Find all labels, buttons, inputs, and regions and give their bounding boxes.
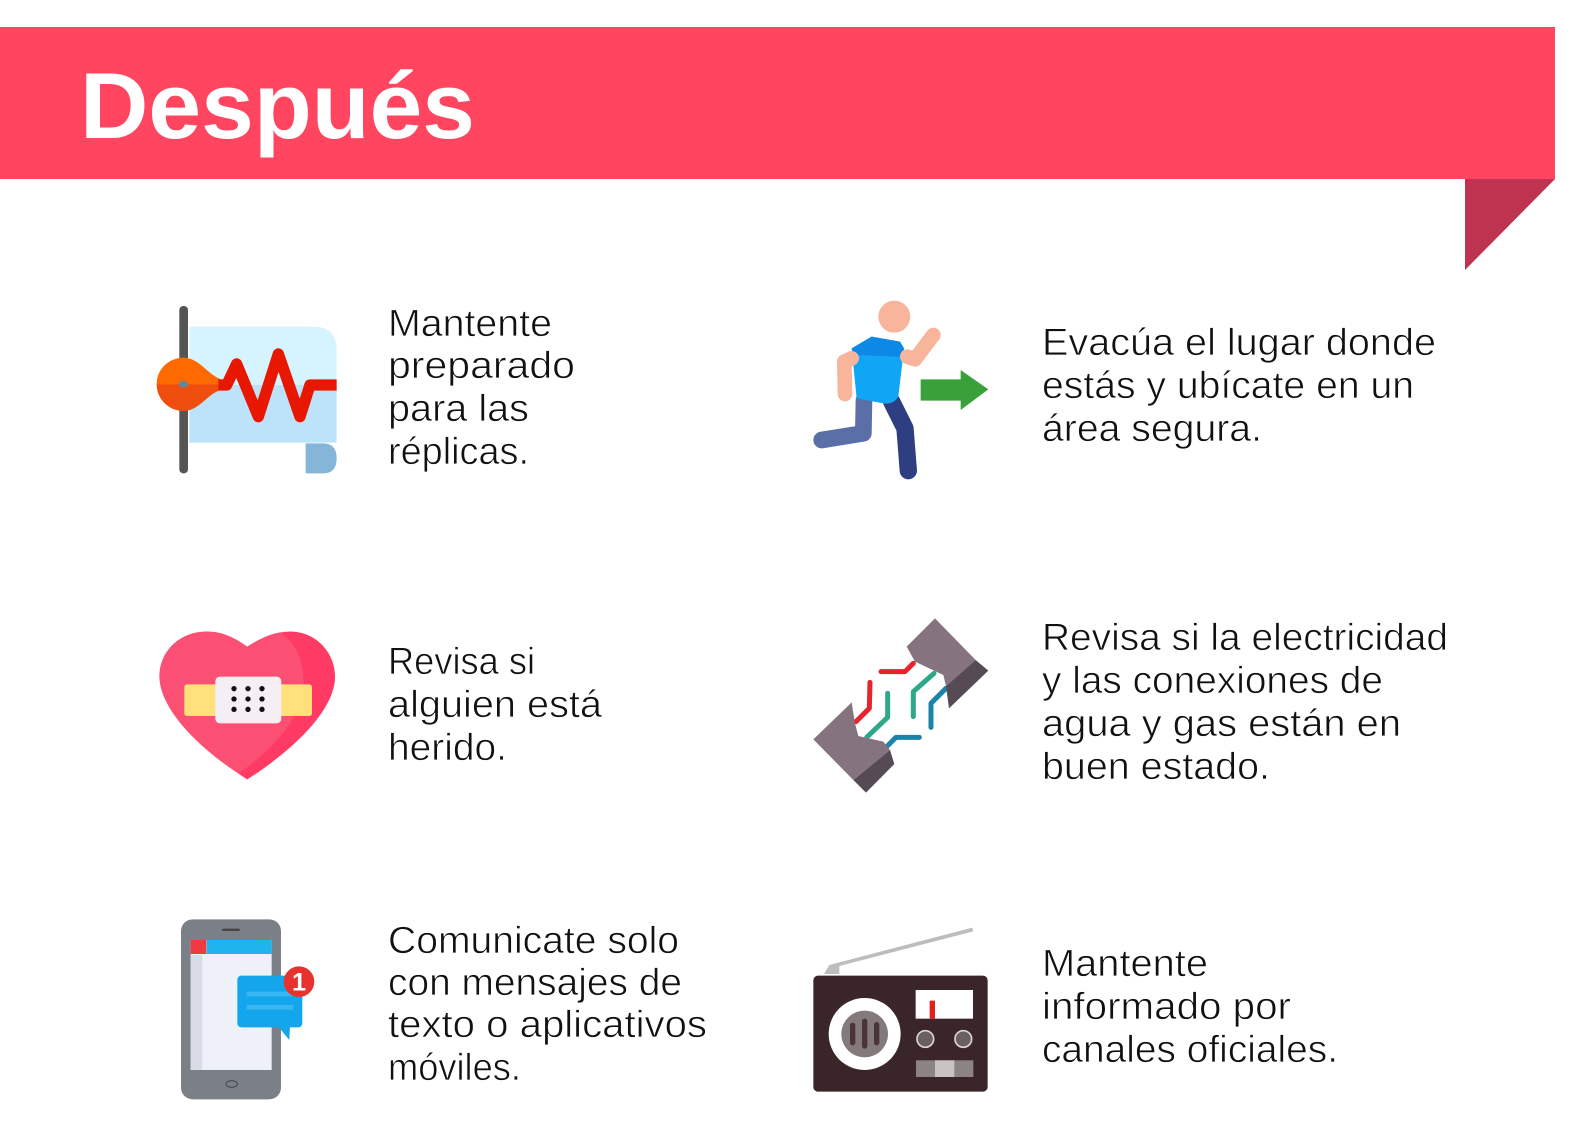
- text: canales oficiales: informado por: [1042, 986, 1291, 1028]
- text: canales oficiales: canales oficiales.: [1042, 1029, 1338, 1071]
- text: herido: [388, 641, 603, 769]
- icon: seismograph: [157, 306, 337, 473]
- text: evacúa: [1042, 322, 1436, 450]
- text: herido: herido.: [388, 727, 507, 769]
- icon: person evacuating with arrow: [822, 301, 988, 471]
- header banner: [0, 27, 1555, 270]
- text: evacúa: Evacúa el lugar donde: [1042, 322, 1436, 364]
- text: mensajes: Comunicate solo: [388, 920, 679, 962]
- text: conexiones: [1042, 617, 1448, 788]
- text: evacúa: área segura.: [1042, 408, 1262, 450]
- text: réplicas: réplicas.: [388, 431, 529, 473]
- icon: phone with message: 1: [292, 969, 306, 997]
- text: canales oficiales: Mantente: [1042, 943, 1208, 985]
- text: canales oficiales: [1042, 943, 1338, 1071]
- text: mensajes: [388, 920, 707, 1089]
- text: herido: Revisa si: [388, 641, 535, 683]
- text: conexiones: y las conexiones de: [1042, 660, 1383, 702]
- icon: heart with bandage: [159, 632, 335, 779]
- text: mensajes: con mensajes de: [388, 962, 682, 1004]
- icon: broken wires: [813, 618, 988, 793]
- text: herido: alguien está: [388, 684, 603, 726]
- icon: phone with message: [181, 919, 314, 1099]
- text: conexiones: buen estado.: [1042, 746, 1270, 788]
- icon: radio: [813, 928, 988, 1092]
- title: Después: [80, 53, 475, 158]
- text: réplicas: [388, 303, 575, 473]
- text: mensajes: texto o aplicativos: [388, 1004, 707, 1046]
- text: evacúa: estás y ubícate en un: [1042, 365, 1414, 407]
- text: conexiones: agua y gas están en: [1042, 703, 1401, 745]
- text: réplicas: para las: [388, 388, 529, 430]
- text: conexiones: Revisa si la electricidad: [1042, 617, 1448, 659]
- text: réplicas: preparado: [388, 345, 575, 387]
- text: mensajes: móviles.: [388, 1047, 521, 1089]
- text: réplicas: Mantente: [388, 303, 552, 345]
